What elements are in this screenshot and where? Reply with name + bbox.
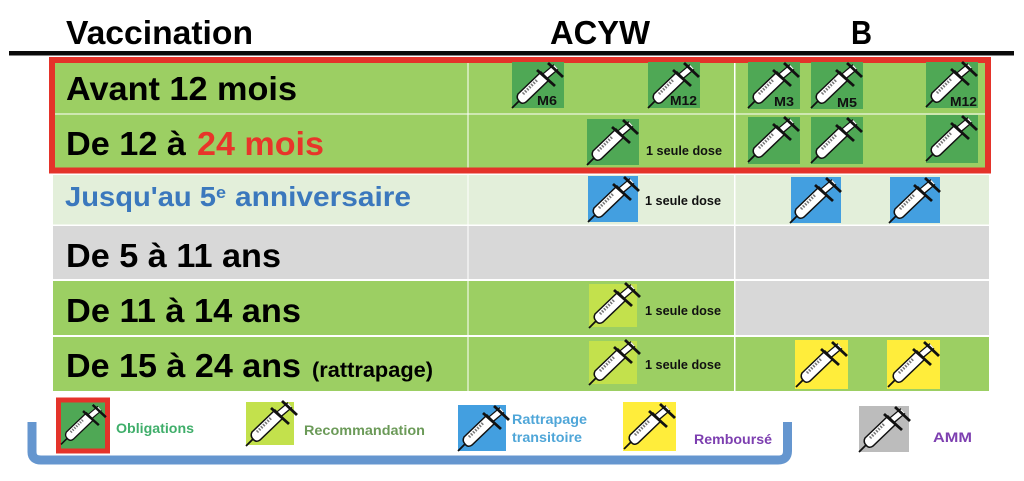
label: Jusqu'au 5 (65, 181, 216, 212)
icon: syringe B reimbursed 1 (795, 340, 848, 389)
icon: syringe M6: M6 (537, 93, 557, 108)
icon: syringe M5: M5 (837, 95, 857, 110)
icon: syringe M12 ACYW: M12 (670, 93, 697, 108)
row: De 15 a 24 ans (53, 337, 989, 391)
row: Jusqu'au 5e anniversaire (53, 175, 989, 224)
icon: syringe B dose 3 row 2 (926, 115, 978, 163)
icon: syringe ACYW 12-24 months (587, 119, 639, 165)
header: table titles (66, 14, 872, 51)
label: De 12 à (66, 125, 187, 162)
legend: Rattrapage transitoire (458, 405, 588, 451)
legend: Obligations (58, 400, 194, 451)
label: Avant 12 mois (66, 70, 297, 107)
icon: syringe ACYW catch-up (588, 176, 639, 222)
legend: AMM: AMM (933, 430, 972, 445)
icon: syringe ACYW 15-24 (589, 340, 640, 385)
icon: syringe M3: M3 (774, 94, 794, 109)
label: De 5 à 11 ans (66, 237, 281, 274)
note: single dose row 6: 1 seule dose (645, 358, 721, 372)
heading: Vaccination: Vaccination (66, 14, 253, 51)
label: anniversaire (235, 181, 411, 212)
row: De 12 a 24 mois (53, 114, 989, 168)
row: De 5 a 11 ans (53, 226, 989, 279)
label: 24 mois (197, 125, 324, 162)
icon: syringe M5 (811, 62, 863, 110)
icon: syringe M12 B: M12 (950, 94, 977, 109)
row: Avant 12 mois (53, 61, 989, 114)
icon: syringe B catch-up 2 (889, 177, 940, 223)
icon: syringe M3 (748, 62, 800, 109)
legend: Obligations: Obligations (116, 421, 194, 436)
legend: Recommandation: Recommandation (304, 423, 425, 438)
label: De 15 à 24 ans (66, 347, 301, 384)
legend bracket (32, 422, 788, 460)
row: De 11 a 14 ans (53, 281, 989, 335)
icon: syringe M6 (512, 62, 564, 108)
label: e (216, 183, 226, 202)
icon: syringe M12 B (926, 62, 978, 109)
icon: syringe B dose 1 row 2 (748, 117, 800, 164)
note: single dose row 5: 1 seule dose (645, 304, 721, 318)
heading: B: B (851, 14, 872, 51)
legend: AMM (859, 406, 972, 452)
label: De 11 à 14 ans (66, 292, 301, 329)
legend: Rattrapage transitoire: transitoire (512, 430, 583, 445)
note: single dose row 2: 1 seule dose (646, 144, 722, 158)
label (66, 347, 433, 384)
legend: Recommandation (246, 401, 425, 446)
icon: syringe M12 ACYW (648, 62, 700, 108)
label (66, 125, 324, 162)
legend: Rembourse: Remboursé (694, 432, 773, 447)
icon: syringe ACYW 11-14 (589, 283, 640, 328)
heading: ACYW: ACYW (550, 14, 651, 51)
legend: Rattrapage transitoire: Rattrapage (512, 412, 588, 427)
label (65, 181, 411, 212)
highlight frame: under 24 months (52, 60, 988, 170)
note: single dose row 3: 1 seule dose (645, 194, 721, 208)
legend: Rembourse (623, 402, 773, 451)
label: (rattrapage) (312, 358, 433, 382)
icon: syringe B reimbursed 2 (887, 340, 940, 389)
icon: syringe B dose 2 row 2 (811, 117, 863, 164)
icon: syringe B catch-up 1 (790, 177, 841, 223)
